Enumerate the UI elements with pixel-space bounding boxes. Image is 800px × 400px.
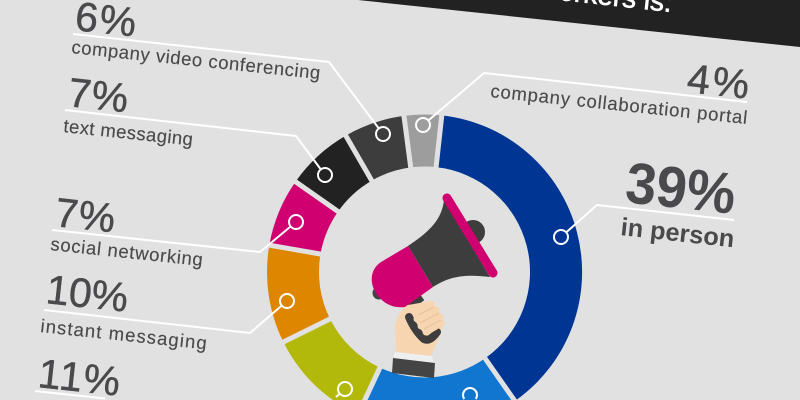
jacket sleeve: [392, 358, 435, 378]
marker: olive segment: [336, 382, 352, 397]
segment: in person 39%: [436, 115, 582, 400]
callout: 6% company video conferencing: company video conferencing: [71, 36, 321, 83]
callout: 39% in person: in person: [619, 213, 736, 253]
horn body: [408, 200, 490, 287]
callout: 10% instant messaging: instant messaging: [40, 315, 208, 353]
segment: company video conferencing 6%: [346, 116, 411, 181]
callout: 7% social networking: 7%: [53, 189, 118, 241]
grip: [409, 317, 437, 340]
callout: 7% social networking: [50, 189, 303, 270]
finger creases: [418, 307, 441, 329]
callout: 39% in person: [554, 150, 739, 253]
rear knob: [372, 286, 386, 300]
fingers: [415, 304, 441, 332]
callout: 7% social networking: social networking: [50, 233, 204, 270]
callout: 7% text messaging: [63, 69, 332, 182]
callout: 10% instant messaging: 10%: [44, 266, 131, 321]
rear barrel: [372, 246, 433, 307]
donut chart: [263, 109, 582, 400]
hand: [395, 301, 444, 356]
callout: 6% company video conferencing: [71, 0, 390, 141]
handle: [409, 297, 422, 306]
segment: company collaboration portal 4%: [404, 114, 442, 167]
callout: 39% in person: 39%: [623, 150, 739, 227]
segment: instant messaging 10%: [267, 245, 330, 342]
shirt cuff: [393, 352, 434, 364]
header band: [358, 0, 800, 47]
callout: 7% text messaging: 7%: [66, 69, 131, 121]
segment: light blue 16%: [365, 358, 514, 400]
callout: 4% company collaboration portal: company collaboration portal: [490, 80, 748, 128]
callout: 7% text messaging: text messaging: [63, 115, 194, 150]
callout: 4% company collaboration portal: [416, 55, 752, 132]
segment: text messaging 7%: [296, 136, 372, 212]
callout: 4% company collaboration portal: 4%: [685, 55, 752, 108]
front knob: [461, 220, 485, 244]
segment: olive 11%: [283, 319, 380, 400]
segment: social networking 7%: [269, 182, 338, 254]
marker: light blue segment: [463, 388, 477, 399]
horn rim: [447, 198, 493, 273]
megaphone icon: [372, 198, 493, 378]
callout: 10% instant messaging: [40, 266, 294, 353]
